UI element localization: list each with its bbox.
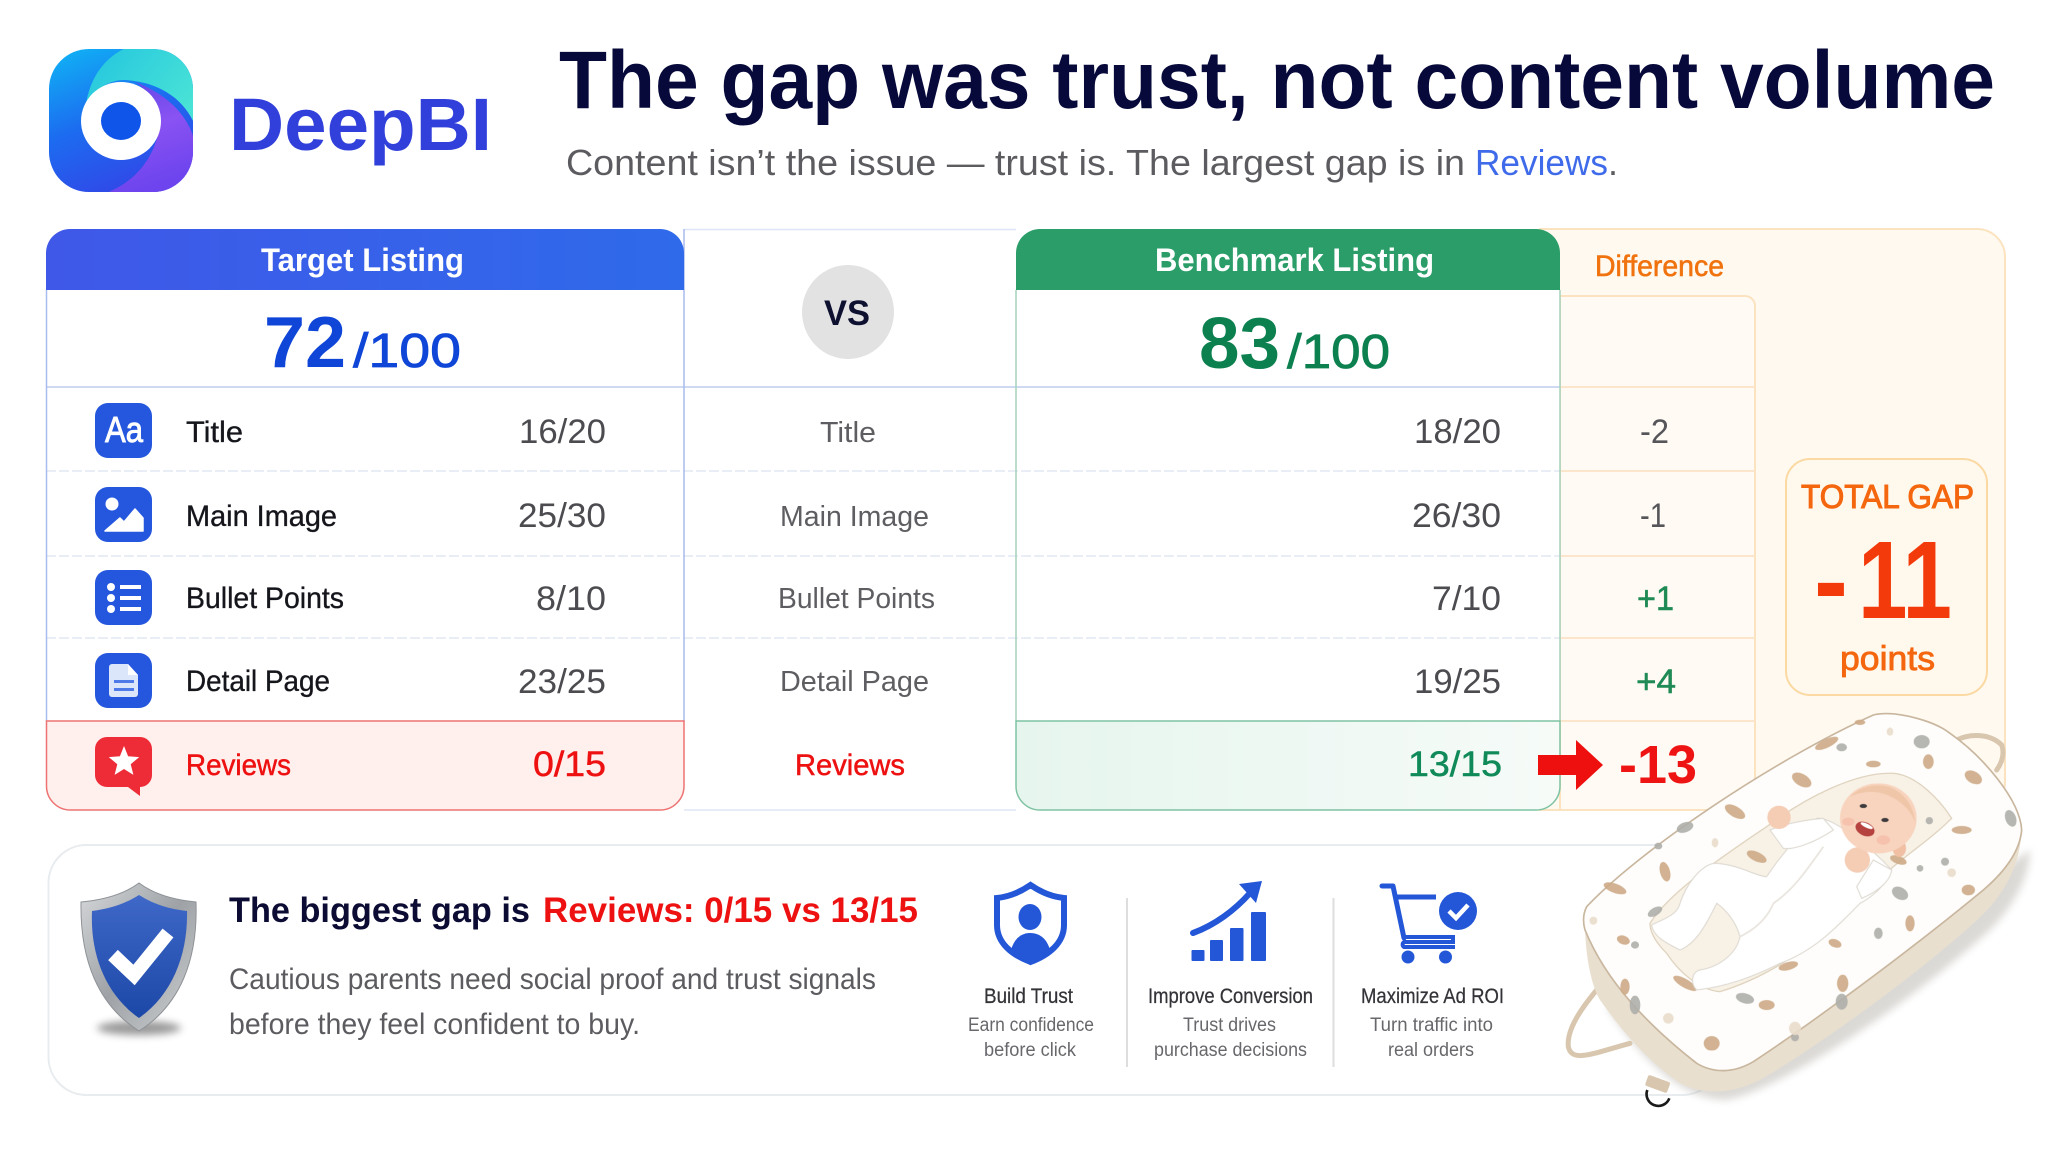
- icon: review star: [95, 737, 152, 796]
- row: reviews highlighted: Reviews: [795, 749, 905, 782]
- panel: difference: [1540, 229, 2005, 810]
- callout: total gap: points: [1840, 640, 1935, 678]
- target score: [264, 303, 461, 383]
- row: detail page: 23/25: [518, 663, 606, 701]
- row: detail page: Detail Page: [780, 666, 929, 698]
- icon: document: [95, 653, 152, 708]
- benefit: improve conversion: [1148, 881, 1313, 1061]
- callout: total gap: 11: [1858, 519, 1952, 642]
- row: title: Title: [186, 416, 243, 449]
- heading: Reviews: 0/15 vs 13/15: [543, 891, 918, 930]
- row: title: Title: [820, 417, 876, 449]
- benefit: maximize ad roi: real orders: [1388, 1040, 1474, 1061]
- benefit: build trust: Build Trust: [984, 985, 1073, 1008]
- subtitle: Content isn’t the issue — trust is. The largest gap is in: [566, 142, 1465, 183]
- target listing header: [46, 229, 684, 290]
- target score: /100: [353, 325, 461, 378]
- row: bullet points: Bullet Points: [778, 583, 935, 615]
- vs badge: VS: [824, 294, 870, 333]
- icon: shield person: [997, 885, 1064, 962]
- target reviews cell: [46, 721, 684, 810]
- row: title: 16/20: [519, 413, 606, 451]
- benchmark score: 83: [1199, 304, 1280, 384]
- benefit: build trust: Earn confidence: [968, 1015, 1094, 1036]
- brand name: DeepBI: [229, 83, 492, 166]
- subtitle: Reviews: [1475, 142, 1608, 183]
- row: title: -2: [1640, 413, 1669, 451]
- icon: cart with check: [1382, 886, 1477, 964]
- row: bullet points: 7/10: [1432, 580, 1501, 618]
- benefit: maximize ad roi: Turn traffic into: [1370, 1015, 1493, 1036]
- heading: [229, 891, 918, 930]
- row: reviews highlighted: 13/15: [1408, 745, 1502, 784]
- benchmark reviews cell: [1016, 721, 1560, 810]
- benchmark score: [1199, 304, 1390, 384]
- body text: Cautious parents need social proof and trust signals: [229, 963, 876, 996]
- difference heading: Difference: [1595, 250, 1724, 283]
- row: detail page: [95, 653, 1676, 708]
- row: detail page: +4: [1636, 663, 1676, 701]
- icon: text: [95, 403, 152, 458]
- comparison table frame: [46, 229, 1560, 810]
- benefit: build trust: before click: [984, 1040, 1076, 1061]
- row: title: 18/20: [1414, 413, 1501, 451]
- row: main image: 26/30: [1412, 497, 1501, 535]
- reviews difference: -13: [1619, 735, 1697, 795]
- benchmark listing header: [1016, 229, 1560, 290]
- benchmark score: /100: [1287, 326, 1390, 379]
- row: bullet points: Bullet Points: [186, 582, 344, 615]
- benefit: improve conversion: Improve Conversion: [1148, 985, 1313, 1008]
- icon: shield with check: [81, 883, 196, 1035]
- logo icon: [49, 46, 196, 196]
- row: reviews highlighted: Reviews: [186, 749, 291, 782]
- icon: image: [95, 487, 152, 542]
- row: main image: Main Image: [780, 501, 929, 533]
- title: The gap was trust, not content volume: [559, 35, 1995, 126]
- callout: total gap: [1786, 459, 1987, 695]
- benefit: maximize ad roi: [1361, 886, 1504, 1061]
- row: main image: 25/30: [518, 497, 606, 535]
- callout: total gap: TOTAL GAP: [1801, 478, 1974, 515]
- subtitle: .: [1608, 142, 1618, 183]
- row: title: [95, 403, 1669, 458]
- row: main image: Main Image: [186, 500, 337, 533]
- body text: [229, 963, 876, 1041]
- target listing header: Target Listing: [261, 242, 464, 278]
- callout: total gap: -: [1814, 519, 1848, 642]
- benefit: build trust: [968, 885, 1094, 1061]
- icon: text: Aa: [105, 409, 144, 450]
- benefit: improve conversion: Trust drives: [1183, 1015, 1276, 1036]
- benchmark listing header: Benchmark Listing: [1155, 242, 1434, 278]
- icon: growth chart: [1192, 881, 1266, 961]
- benefit: maximize ad roi: Maximize Ad ROI: [1361, 985, 1504, 1008]
- target score: 72: [264, 303, 346, 383]
- benefit: improve conversion: purchase decisions: [1154, 1040, 1307, 1061]
- product illustration: baby in nest: [1568, 714, 2030, 1106]
- row: reviews highlighted: [46, 721, 1697, 810]
- panel: takeaway: [48, 845, 1720, 1095]
- row: detail page: Detail Page: [186, 665, 330, 698]
- body text: before they feel confident to buy.: [229, 1008, 640, 1041]
- heading: The biggest gap is: [229, 891, 530, 930]
- row: main image: -1: [1640, 497, 1666, 535]
- row: bullet points: 8/10: [536, 580, 606, 618]
- row: detail page: 19/25: [1414, 663, 1501, 701]
- row: bullet points: [95, 570, 1674, 625]
- row: bullet points: +1: [1637, 580, 1674, 618]
- row: main image: [95, 487, 1666, 542]
- row: reviews highlighted: 0/15: [533, 745, 606, 784]
- icon: list: [95, 570, 152, 625]
- arrow: [1538, 740, 1603, 790]
- vs badge: [802, 265, 894, 359]
